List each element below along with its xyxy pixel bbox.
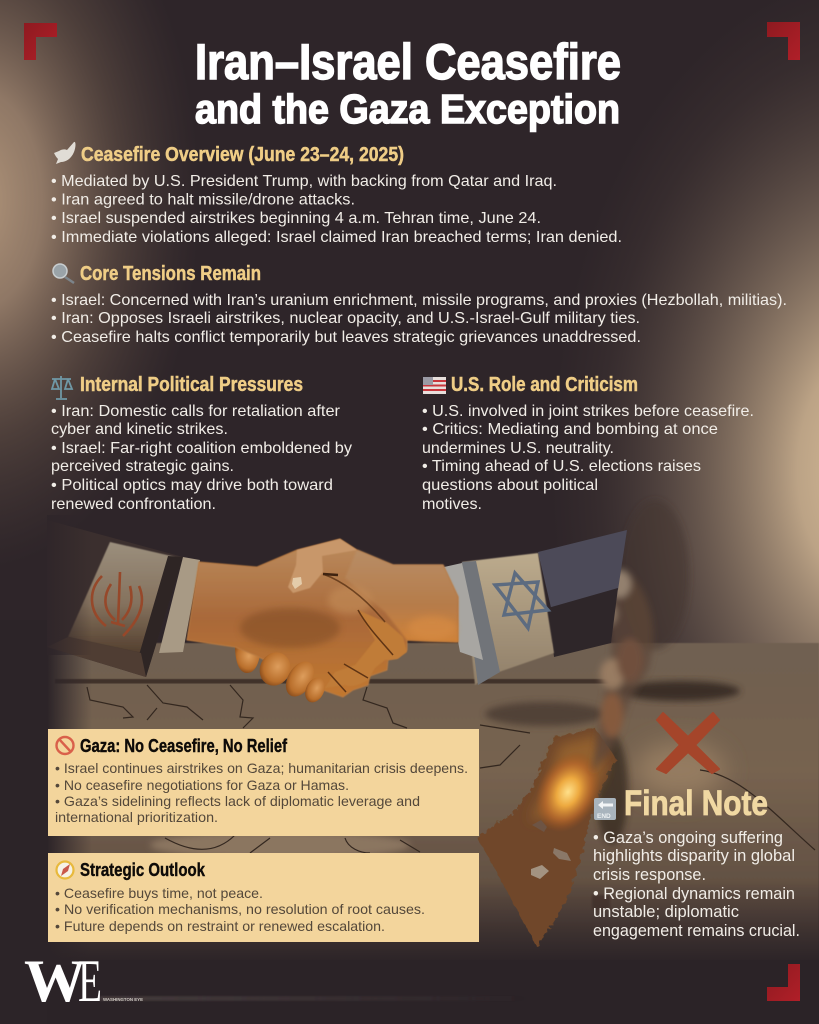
lower finger behind (235, 645, 260, 673)
icon: U.S. flag (423, 377, 446, 394)
icon: END arrow: END (597, 813, 611, 820)
text: pressures bullets (51, 403, 352, 513)
text: overview bullets: • Mediated by U.S. President Trump, with backing from Qatar and Iraq. (51, 173, 557, 190)
logo: Washington Eye: W (24, 948, 86, 1014)
text: U.S. role bullets: questions about political (422, 477, 598, 494)
text: U.S. role bullets: • U.S. involved in joint strikes before ceasefire. (422, 403, 754, 420)
text: overview bullets: • Israel suspended airstrikes beginning 4 a.m. Tehran time, June 24. (51, 210, 541, 227)
icon: scales (52, 376, 72, 399)
thumb (288, 539, 357, 593)
text: Gaza bullets: international prioritization. (55, 809, 218, 825)
text: outlook bullets (55, 885, 425, 934)
text: outlook bullets: • Future depends on restraint or renewed escalation. (55, 918, 385, 934)
section: core tensions (51, 263, 787, 346)
knuckle fingers (325, 610, 407, 688)
text: overview bullets: • Immediate violations alleged: Israel claimed Iran breached terms; Iran denied. (51, 229, 622, 246)
heading: Gaza panel: Gaza: No Ceasefire, No Relief (80, 736, 288, 756)
illustration: smoke column (592, 500, 689, 772)
text: U.S. role bullets: undermines U.S. neutrality. (422, 440, 614, 457)
icon: magnifying glass (53, 264, 74, 283)
text: tensions bullets: • Iran: Opposes Israeli airstrikes, nuclear opacity, and U.S.-Israel-Gulf military ties. (51, 310, 640, 327)
text: Gaza bullets (55, 760, 468, 825)
logo: Washington Eye: WASHINGTON EYE (103, 997, 143, 1002)
heading: final note: Final Note (624, 784, 768, 823)
text: overview bullets (51, 173, 622, 246)
fingertips (254, 647, 329, 706)
text: pressures bullets: • Israel: Far-right coalition emboldened by (51, 440, 352, 457)
right hand back (345, 550, 458, 642)
hand silhouette (187, 539, 458, 697)
text: overview bullets: • Iran agreed to halt missile/drone attacks. (51, 192, 355, 208)
corner mark: bottom right (767, 964, 800, 1001)
heading: outlook panel: Strategic Outlook (80, 860, 206, 880)
text: pressures bullets: • Political optics may drive both toward (51, 477, 333, 494)
text: Gaza bullets: • Gaza’s sidelining reflects lack of diplomatic leverage and (55, 793, 420, 809)
text: tensions bullets: • Ceasefire halts conflict temporarily but leaves strategic grievances unaddressed. (51, 329, 641, 346)
heading: ceasefire overview: Ceasefire Overview (June 23–24, 2025) (81, 144, 404, 166)
icon: dove (54, 142, 76, 164)
title: Iran–Israel Ceasefire (195, 34, 621, 90)
icon: END arrow (594, 798, 616, 820)
heading: core tensions: Core Tensions Remain (80, 263, 261, 285)
illustration: left sleeve with Iran emblem (47, 515, 200, 677)
text: final note bullets (593, 829, 800, 940)
text: tensions bullets (51, 292, 787, 346)
icon: Iran emblem (92, 572, 142, 636)
corner mark: top left (24, 23, 57, 60)
text: U.S. role bullets (422, 403, 754, 513)
corner mark: top right (767, 22, 800, 60)
illustration: cracked map table (0, 620, 819, 1024)
shading (240, 608, 340, 648)
panel: Gaza no ceasefire (48, 729, 479, 836)
text: final note bullets: highlights disparity in global (593, 847, 795, 865)
section: U.S. role and criticism (422, 374, 754, 513)
text: pressures bullets: perceived strategic gains. (51, 458, 234, 475)
logo: Washington Eye (24, 948, 143, 1014)
text: final note bullets: unstable; diplomatic (593, 903, 739, 921)
panel: strategic outlook (48, 853, 479, 942)
icon: prohibited sign (56, 737, 74, 754)
text: Gaza bullets: • No ceasefire negotiations for Gaza or Hamas. (55, 777, 349, 793)
title: and the Gaza Exception (195, 86, 620, 132)
text: final note bullets: • Regional dynamics remain (593, 885, 795, 903)
illustration: clasped hands (187, 539, 458, 706)
text: pressures bullets: • Iran: Domestic calls for retaliation after (51, 403, 341, 420)
text: pressures bullets: cyber and kinetic strikes. (51, 421, 228, 438)
logo: Washington Eye: E (78, 948, 102, 1014)
text: final note bullets: crisis response. (593, 866, 706, 884)
heading: U.S. role: U.S. Role and Criticism (451, 374, 638, 396)
icon: compass (56, 862, 74, 878)
illustration: burning Gaza map (477, 728, 628, 947)
section: internal political pressures (51, 374, 352, 513)
text: U.S. role bullets: motives. (422, 496, 482, 513)
text: U.S. role bullets: • Timing ahead of U.S. elections raises (422, 458, 701, 475)
text: tensions bullets: • Israel: Concerned with Iran’s uranium enrichment, missile programs, and proxies (Hezbollah, militias). (51, 292, 787, 309)
text: Gaza bullets: • Israel continues airstrikes on Gaza; humanitarian crisis deepens. (55, 760, 468, 776)
icon: Star of David (495, 573, 548, 628)
section: final note (593, 784, 800, 940)
text: final note bullets: • Gaza’s ongoing suffering (593, 829, 783, 847)
illustration: right sleeve with Star of David (444, 530, 627, 685)
heading: internal pressures: Internal Political Pressures (80, 374, 303, 396)
text: outlook bullets: • No verification mechanisms, no resolution of root causes. (55, 901, 425, 917)
illustration: red X mark (657, 713, 719, 773)
text: final note bullets: engagement remains crucial. (593, 922, 800, 940)
text: outlook bullets: • Ceasefire buys time, not peace. (55, 885, 263, 901)
section: ceasefire overview (51, 142, 622, 246)
text: pressures bullets: renewed confrontation. (51, 496, 216, 513)
title (195, 34, 621, 132)
text: U.S. role bullets: • Critics: Mediating and bombing at once (422, 421, 718, 438)
